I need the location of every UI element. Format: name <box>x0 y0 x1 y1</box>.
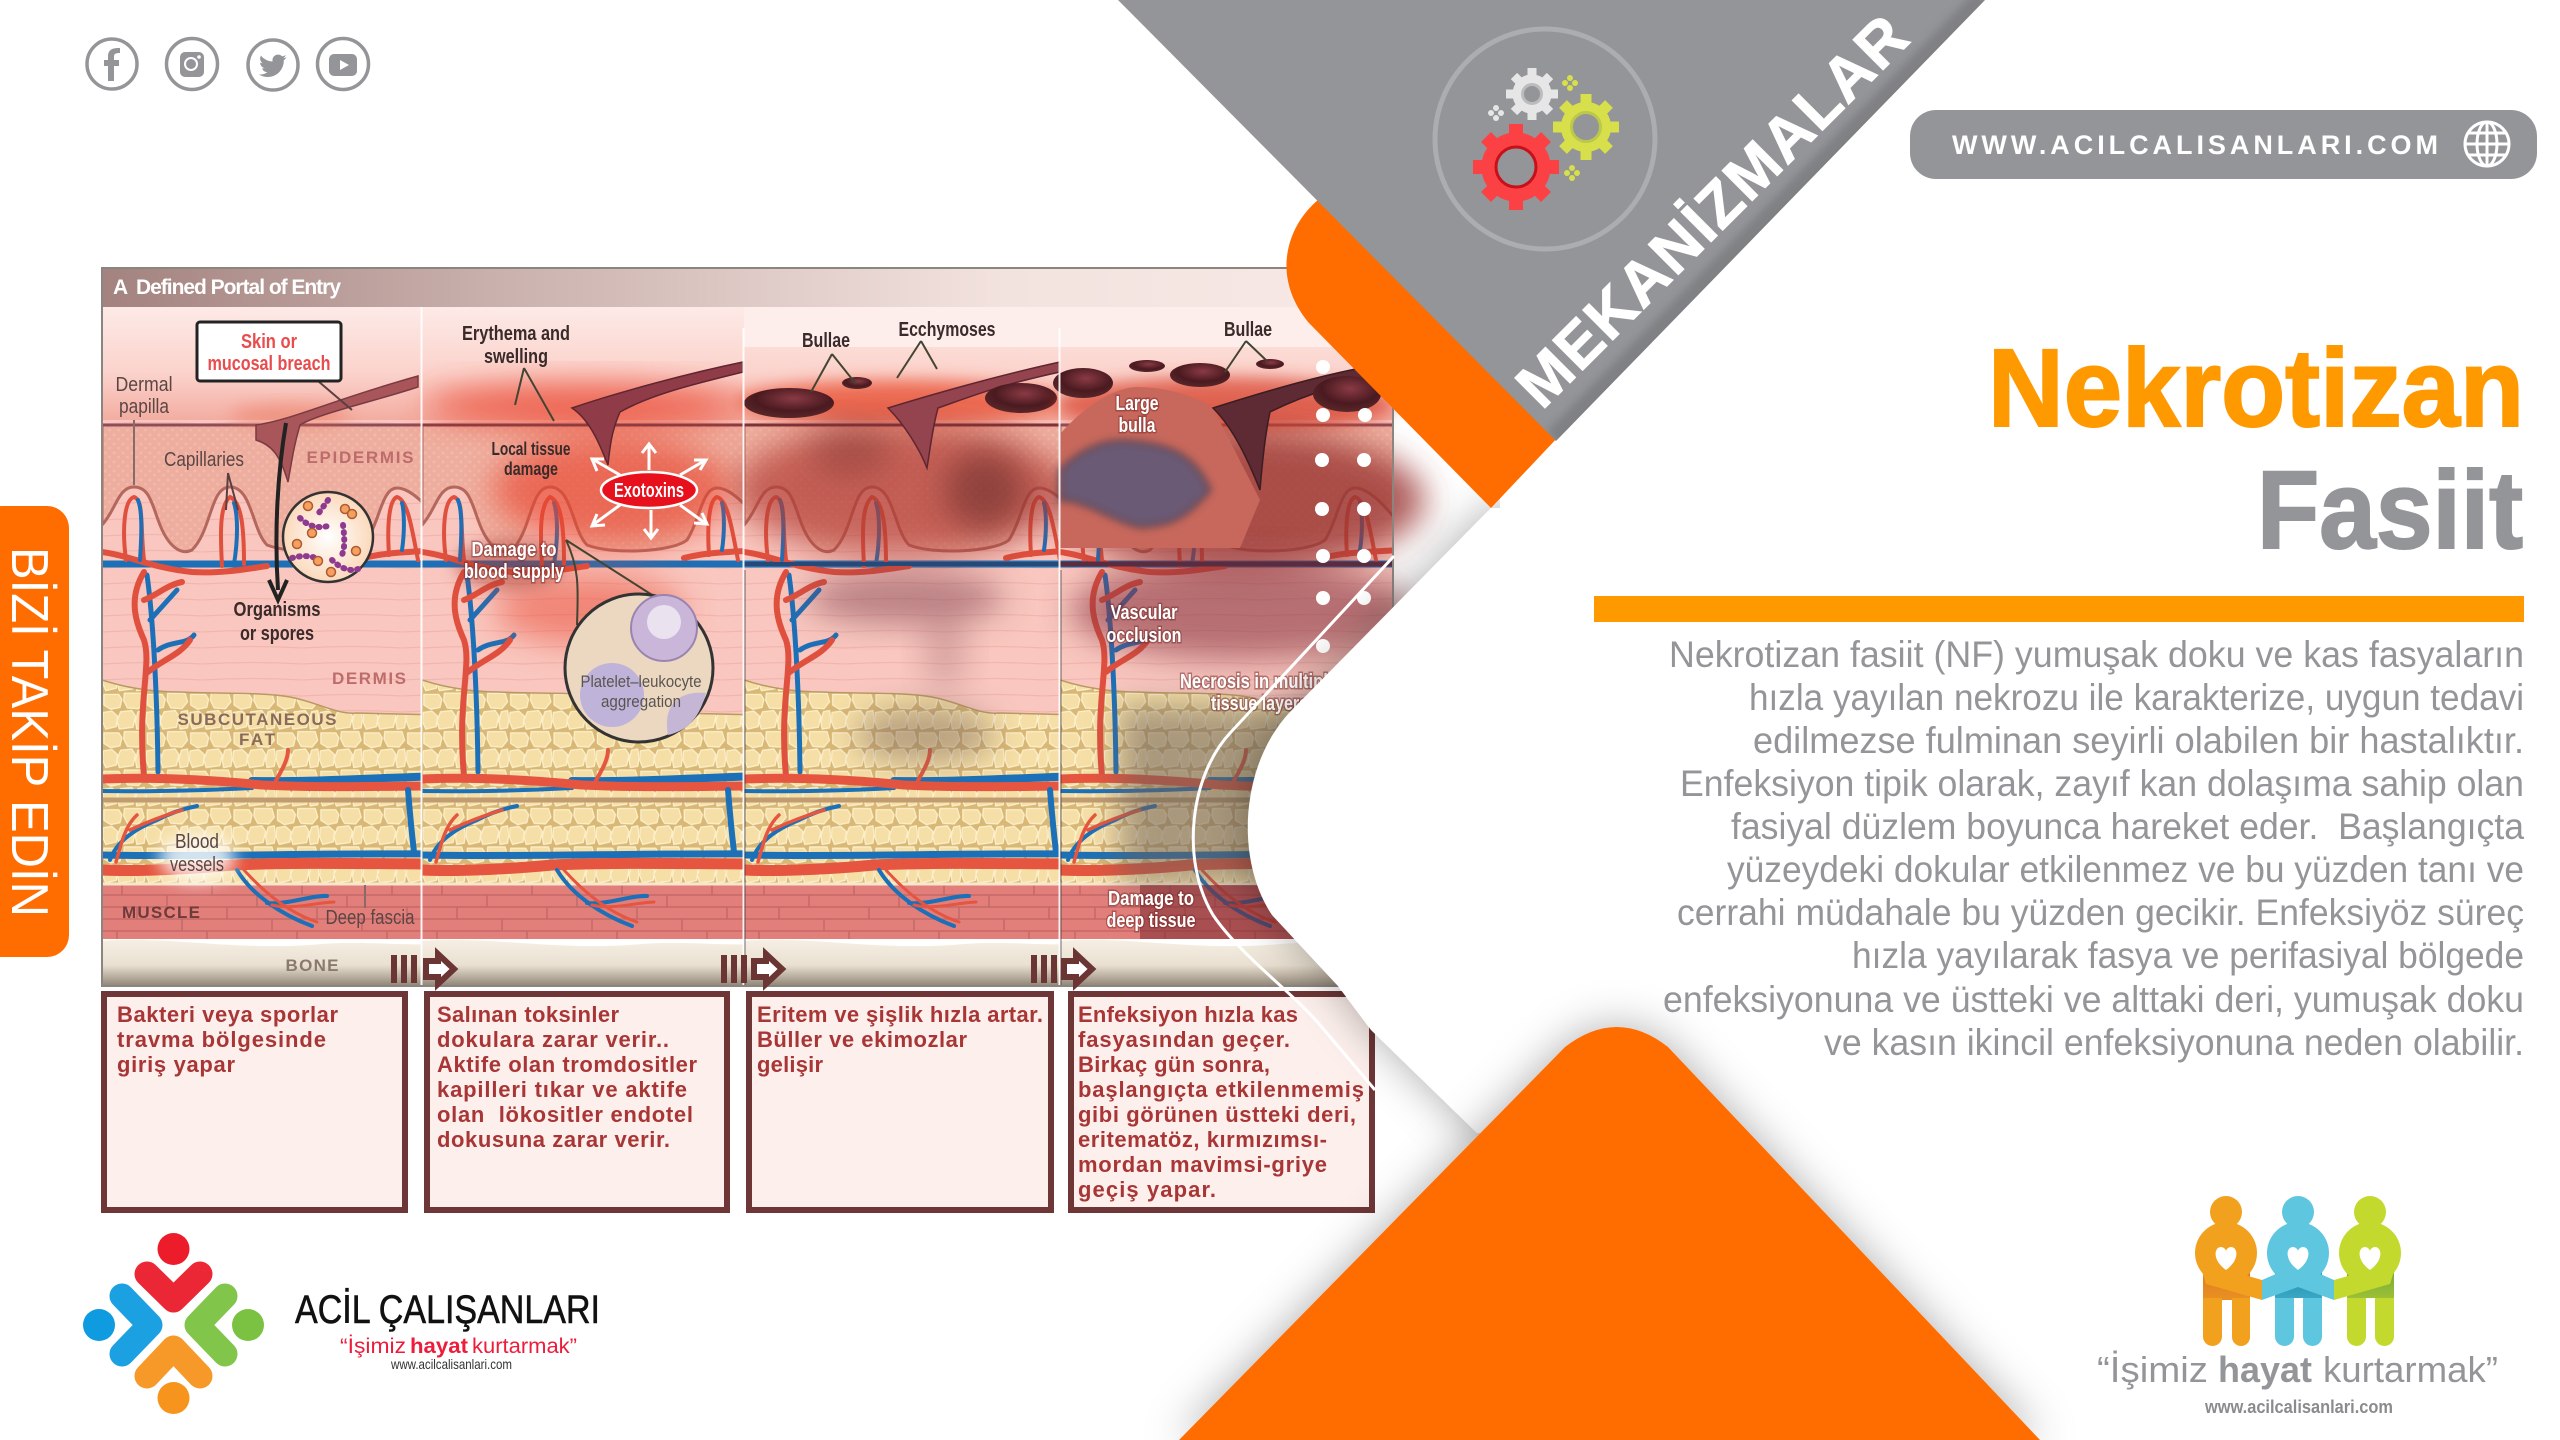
grey triangle banner <box>1118 0 1985 441</box>
body text: Enfeksiyon tipik olarak, zayıf kan dolaşıma sahip olan <box>1680 763 2524 804</box>
label: bullae: Bullae <box>1224 319 1272 341</box>
url: www.acilcalisanlari.com <box>2204 1397 2393 1417</box>
slogan <box>2097 1349 2498 1390</box>
icon: bacteria circle <box>283 492 373 582</box>
body text <box>1663 634 2524 1063</box>
body text: ve kasın ikincil enfeksiyonuna neden olabilir. <box>1824 1022 2524 1063</box>
label: deep fascia <box>326 885 415 929</box>
body text: fasiyal düzlem boyunca hareket eder. Başlangıçta <box>1731 806 2524 847</box>
label: vascular occlusion <box>1106 602 1182 647</box>
gear: red <box>1473 124 1559 210</box>
icon: instagram <box>166 38 218 90</box>
caption box 2: dokulara zarar verir.. <box>437 1027 669 1052</box>
caption box 1: travma bölgesinde <box>117 1027 326 1052</box>
body text: cerrahi müdahale bu yüzden gecikir. Enfeksiyöz süreç <box>1677 892 2524 933</box>
caption box 4: Birkaç gün sonra, <box>1078 1052 1270 1077</box>
tissue stage 3: bullae and ecchymoses <box>735 307 1084 986</box>
white overlay shape <box>1248 508 1700 1133</box>
bottom orange triangle <box>1179 1027 2040 1440</box>
title: Nekrotizan Fasiit <box>1988 327 2524 572</box>
body text: yüzeydeki dokular etkilenmez ve bu yüzden tanı ve <box>1727 849 2524 890</box>
label: organisms or spores: or spores <box>240 623 314 645</box>
gears icon <box>1435 29 1655 249</box>
label: necrosis in multiple tissue layers: Necrosis in multiple <box>1180 671 1337 693</box>
caption box 4: mordan mavimsi-griye <box>1078 1152 1327 1177</box>
label: blood vessels: vessels <box>170 854 224 876</box>
illustration panel: necrotizing fasciitis stages <box>102 268 1425 986</box>
slogan: kurtarmak” <box>2323 1349 2498 1390</box>
caption box 3: Eritem ve şişlik hızla artar. <box>757 1002 1043 1027</box>
body text: edilmezse fulminan seyirli olabilen bir hastalıktır. <box>1753 720 2524 761</box>
label: skin or mucosal breach: Skin or <box>241 331 297 353</box>
person: orange <box>2195 1196 2262 1346</box>
label: bullae <box>802 330 856 392</box>
caption box 4: fasyasından geçer. <box>1078 1027 1290 1052</box>
caption box 2: dokusuna zarar verir. <box>437 1127 670 1152</box>
caption box 1: giriş yapar <box>117 1052 235 1077</box>
white decorative dots <box>1315 360 1372 653</box>
body text: Nekrotizan fasiit (NF) yumuşak doku ve kas fasyaların <box>1669 634 2524 675</box>
caption box 2 <box>427 994 727 1210</box>
url pill <box>1910 110 2537 179</box>
sparkles <box>1562 75 1580 181</box>
label: muscle: MUSCLE <box>122 903 200 922</box>
label: dermal papilla: papilla <box>119 396 170 418</box>
logo mark <box>83 1233 264 1414</box>
label: skin or mucosal breach: mucosal breach <box>208 353 330 375</box>
exotoxins burst with arrows <box>592 444 707 538</box>
person: blue <box>2262 1196 2334 1346</box>
label: subcutaneous fat: SUBCUTANEOUS <box>178 710 336 729</box>
caption box 4: geçiş yapar. <box>1078 1177 1216 1202</box>
exotoxins burst with arrows: Exotoxins <box>614 480 684 502</box>
icon: facebook <box>87 39 137 89</box>
callout: platelet leukocyte aggregation: aggregation <box>601 692 681 711</box>
label: blood vessels <box>159 831 235 882</box>
side tab: BİZİ TAKİP EDİN: BİZİ TAKİP EDİN <box>0 547 58 917</box>
label: ecchymoses: Ecchymoses <box>898 319 996 341</box>
label: damage to deep tissue: deep tissue <box>1106 910 1196 932</box>
arrows between stages <box>394 954 1092 984</box>
callout: platelet leukocyte aggregation <box>565 540 713 742</box>
label: capillaries <box>164 449 244 510</box>
label: subcutaneous fat <box>178 710 336 749</box>
orange shape behind grey triangle <box>1286 200 1560 508</box>
label: erythema and swelling: swelling <box>484 346 548 368</box>
caption box 3: Büller ve ekimozlar <box>757 1027 967 1052</box>
person: green <box>2334 1196 2401 1346</box>
label: local tissue damage: Local tissue <box>492 439 570 459</box>
icon: twitter <box>248 40 298 90</box>
title: Nekrotizan Fasiit: Nekrotizan <box>1988 327 2524 450</box>
caption box 1 <box>104 994 405 1210</box>
panel header: A Defined Portal of Entry <box>102 268 1393 307</box>
label: skin or mucosal breach <box>197 322 352 410</box>
body text: hızla yayılarak fasya ve perifasiyal bölgede <box>1852 935 2524 976</box>
label: deep fascia: Deep fascia <box>326 907 415 929</box>
slogan: “İşimiz <box>2097 1349 2208 1390</box>
label: large bulla <box>1116 393 1158 437</box>
logo wordmark: ACİL ÇALIŞANLARI <box>295 1287 600 1332</box>
label: epidermis: EPIDERMIS <box>306 448 414 467</box>
label: local tissue damage <box>492 439 570 479</box>
gear: white <box>1506 68 1558 120</box>
label: bone: BONE <box>286 956 338 975</box>
caption box 4: başlangıçta etkilenmemiş <box>1078 1077 1364 1102</box>
icon: globe <box>2465 122 2509 166</box>
arrow: organisms entering <box>269 423 287 600</box>
label: subcutaneous fat: FAT <box>239 730 276 749</box>
label: necrosis in multiple tissue layers: tissue layers <box>1211 693 1308 715</box>
caption box 3 <box>749 994 1051 1210</box>
white curve line <box>1193 556 1394 1090</box>
label: vascular occlusion: occlusion <box>1106 625 1182 647</box>
title: Nekrotizan Fasiit: Fasiit <box>2257 449 2523 572</box>
body text: enfeksiyonuna ve üstteki ve alttaki deri, yumuşak doku <box>1663 979 2524 1020</box>
url pill: WWW.ACILCALISANLARI.COM <box>1952 130 2438 160</box>
label: organisms or spores <box>234 599 320 645</box>
label: erythema and swelling <box>462 323 570 421</box>
logo url: www.acilcalisanlari.com <box>390 1356 512 1372</box>
label: organisms or spores: Organisms <box>234 599 320 621</box>
label: damage to deep tissue: Damage to <box>1108 888 1194 910</box>
callout: platelet leukocyte aggregation: Platelet–leukocyte <box>580 672 702 691</box>
logo slogan: “İşimiz <box>340 1335 406 1358</box>
label: necrosis in multiple tissue layers <box>1180 671 1337 715</box>
icons: bullae on skin <box>1053 359 1381 412</box>
label: damage to blood supply: Damage to <box>472 539 556 561</box>
caption box 4: eritematöz, kırmızımsı- <box>1078 1127 1327 1152</box>
label: dermis: DERMIS <box>332 669 406 688</box>
gear: yellow <box>1553 94 1619 160</box>
icon: youtube <box>318 38 368 90</box>
bubble: large bulla cavity <box>1060 441 1210 527</box>
caption box 2: Salınan toksinler <box>437 1002 619 1027</box>
label: capillaries: Capillaries <box>164 449 244 471</box>
label: damage to deep tissue <box>1106 888 1196 932</box>
label: ecchymoses <box>897 319 996 378</box>
label: large bulla: Large <box>1116 393 1158 415</box>
icons: bullae on skin <box>744 377 1057 418</box>
label: damage to blood supply <box>464 539 565 583</box>
panel header: A Defined Portal of Entry: A Defined Portal of Entry <box>113 276 341 299</box>
caption box 2: olan lökositler endotel <box>437 1102 693 1127</box>
label: dermal papilla: Dermal <box>116 374 172 396</box>
caption box 2: Aktife olan tromdositler <box>437 1052 697 1077</box>
tissue stage 4: large bulla and necrosis <box>1053 307 1425 986</box>
label: local tissue damage: damage <box>504 459 558 479</box>
slogan: hayat <box>2218 1349 2312 1390</box>
caption box 2: kapilleri tıkar ve aktife <box>437 1077 687 1102</box>
orange divider bar <box>1594 596 2524 622</box>
logo slogan <box>340 1335 577 1358</box>
caption box 1: Bakteri veya sporlar <box>117 1002 338 1027</box>
caption box 4 <box>1071 994 1372 1210</box>
label: bullae <box>1224 319 1272 372</box>
caption box 3: gelişir <box>757 1052 823 1077</box>
caption box 4: Enfeksiyon hızla kas <box>1078 1002 1298 1027</box>
logo slogan: kurtarmak” <box>472 1335 577 1358</box>
label: blood vessels: Blood <box>175 831 219 853</box>
label: large bulla: bulla <box>1118 415 1156 437</box>
label: damage to blood supply: blood supply <box>464 561 565 583</box>
social media icons <box>87 38 368 90</box>
logo: Acil Çalışanları <box>83 1233 600 1414</box>
tissue stage 1: portal of entry <box>102 307 442 986</box>
logo slogan: hayat <box>410 1335 468 1358</box>
tissue stage 2: toxin damage <box>422 307 762 986</box>
label: bullae: Bullae <box>802 330 850 352</box>
label: erythema and swelling: Erythema and <box>462 323 570 345</box>
body text: hızla yayılan nekrozu ile karakterize, uygun tedavi <box>1749 677 2524 718</box>
heading: MEKANİZMALAR: MEKANİZMALAR <box>1503 2 1922 421</box>
caption box 4: gibi görünen üstteki deri, <box>1078 1102 1356 1127</box>
logo: three people slogan <box>2097 1196 2498 1417</box>
label: dermal papilla <box>116 374 172 485</box>
label: vascular occlusion: Vascular <box>1110 602 1178 624</box>
